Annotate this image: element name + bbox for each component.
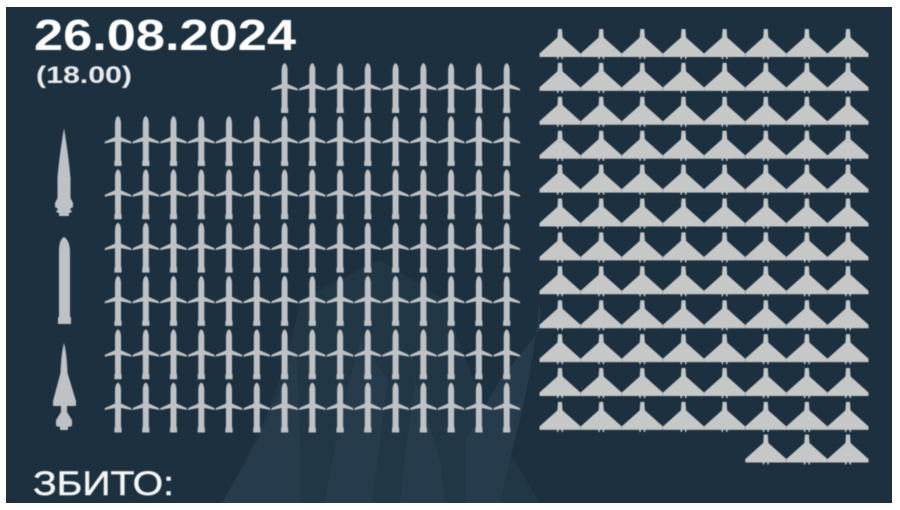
- subtitle: time: (18.00): [36, 62, 132, 89]
- label: shot down: ЗБИТО:: [33, 465, 174, 503]
- icon: cylindrical missile: [58, 237, 71, 324]
- icon: anti-ship missile: [53, 343, 76, 430]
- drones: bottom partial row: [745, 434, 868, 464]
- title: date: 26.08.2024: [34, 11, 297, 60]
- icon: ballistic missile: [55, 128, 73, 216]
- cruise missiles: top partial row: [271, 63, 520, 113]
- drones grid: [540, 29, 868, 464]
- cruise missiles grid: [104, 63, 520, 432]
- emblem watermark: [222, 260, 540, 503]
